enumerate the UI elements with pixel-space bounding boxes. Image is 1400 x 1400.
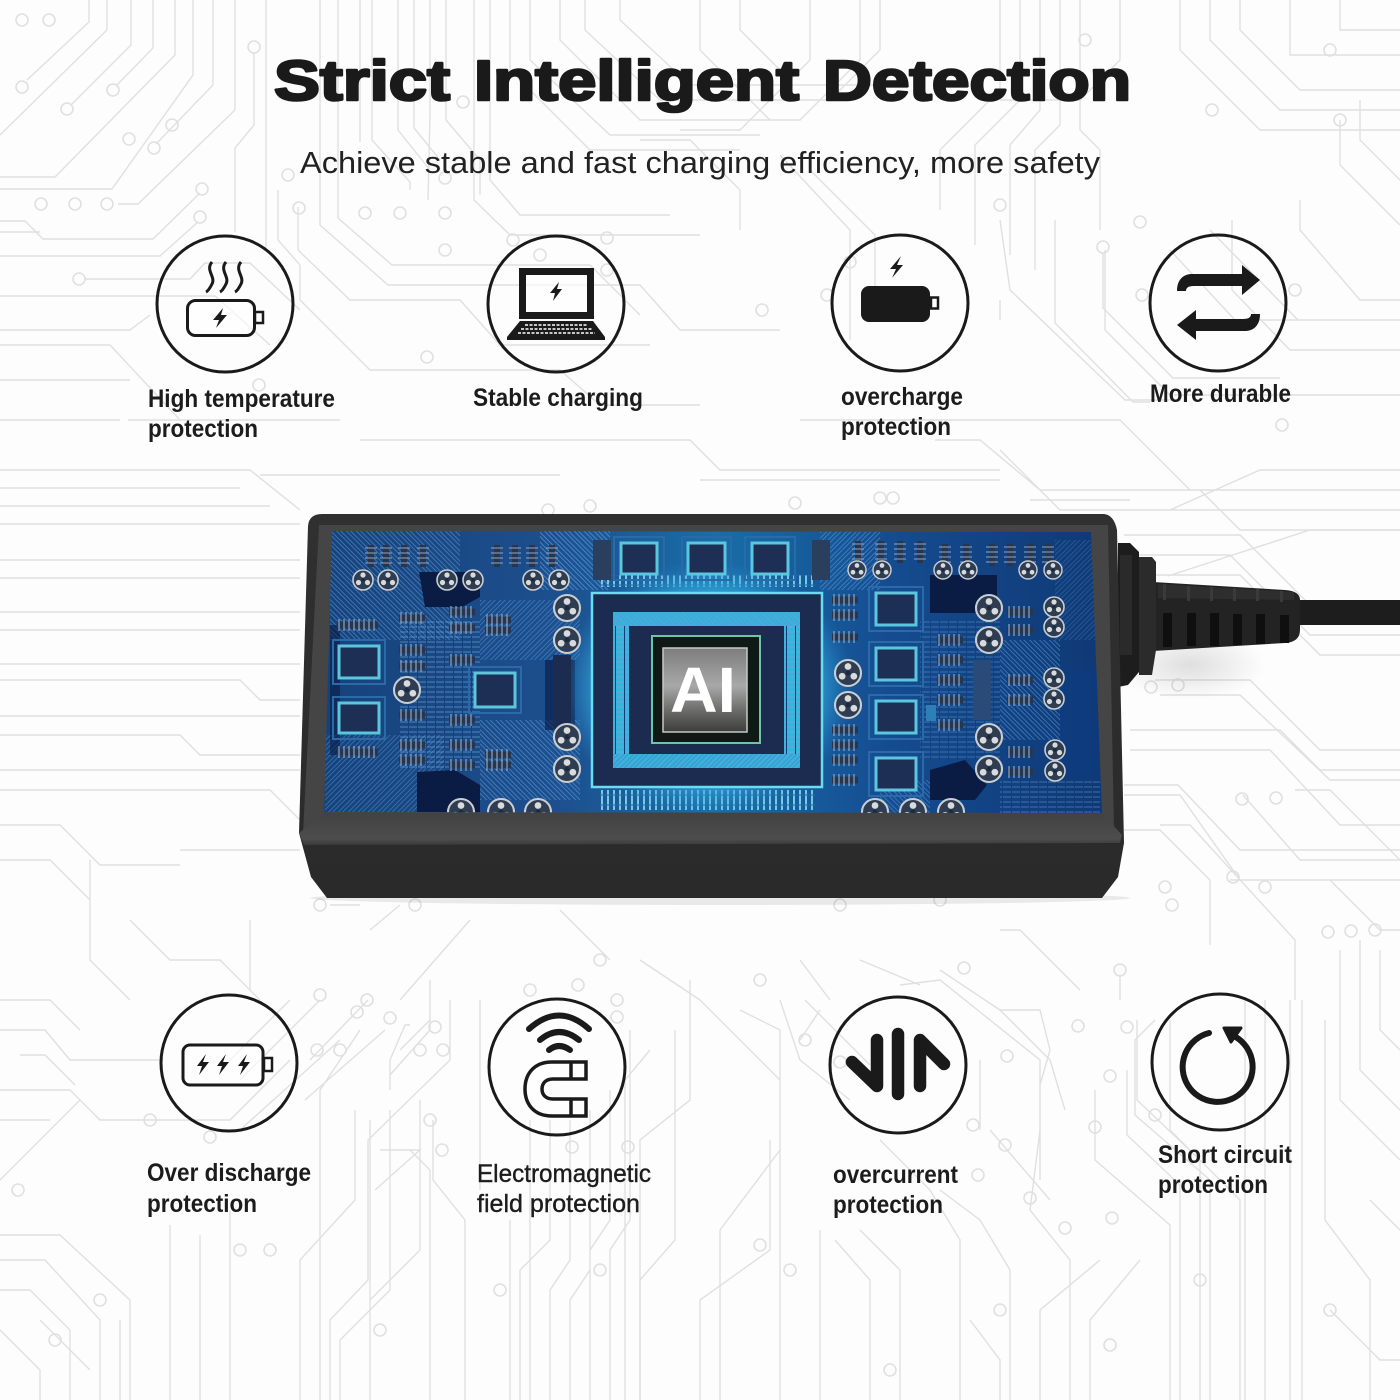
label [148,385,335,443]
lower ledge [299,813,1122,845]
icon: current waves [852,1034,944,1094]
screws [353,561,1065,825]
central chip glow [571,570,847,810]
icon: exchange arrows [1177,265,1260,340]
strain relief [1118,543,1300,687]
feature: overcharge protection [832,235,968,441]
feature: electromagnetic field protection [477,999,651,1218]
small chips [339,543,916,790]
icon: wifi and magnet [525,1016,589,1116]
feature: overcurrent protection [830,997,966,1219]
label: protection [1158,1171,1268,1199]
title [274,49,1131,113]
label: protection [148,415,258,443]
label [1158,1141,1293,1199]
label: Over discharge [147,1159,311,1187]
feature: stable charging [473,236,643,412]
AI chip outer frame [592,593,822,787]
circuit screen [320,528,1110,825]
label: Short circuit [1158,1141,1293,1169]
power adapter [299,514,1400,898]
icon: laptop [507,272,605,340]
label: Electromagnetic [477,1160,651,1188]
icon: battery with three bolts [183,1045,272,1085]
cable [1296,600,1400,625]
icon: hot battery [188,262,263,336]
label: Stable charging [473,384,643,412]
title: Strict [274,49,450,113]
feature: short circuit protection [1152,994,1293,1199]
label: More durable [1150,380,1291,408]
label [147,1159,311,1218]
AI chip inner circuit ring [613,612,800,768]
label: protection [833,1191,943,1219]
label [477,1160,651,1218]
icon: circular arrow [1183,1028,1253,1102]
adapter shadows [310,630,1265,905]
label: overcharge [841,383,963,411]
trace textures [325,530,1100,815]
icon: full battery [861,256,938,322]
label: protection [841,413,951,441]
label: High temperature [148,385,335,413]
components [337,540,1054,786]
subtitle: Achieve stable and fast charging efficiency, more safety [300,145,1101,180]
bezel [303,525,1114,833]
label [841,383,963,441]
dark patches [330,572,997,812]
feature: more durable [1150,235,1291,408]
AI label: AI [670,654,736,726]
title: Detection [823,49,1131,113]
feature: over discharge protection [147,995,311,1218]
label: overcurrent [833,1161,959,1189]
label: protection [147,1190,257,1218]
label [833,1161,959,1219]
adapter body [299,514,1124,898]
label: field protection [477,1190,640,1218]
feature: high temperature protection [148,236,335,443]
AI chip die [652,636,760,743]
title: Intelligent [474,49,799,113]
